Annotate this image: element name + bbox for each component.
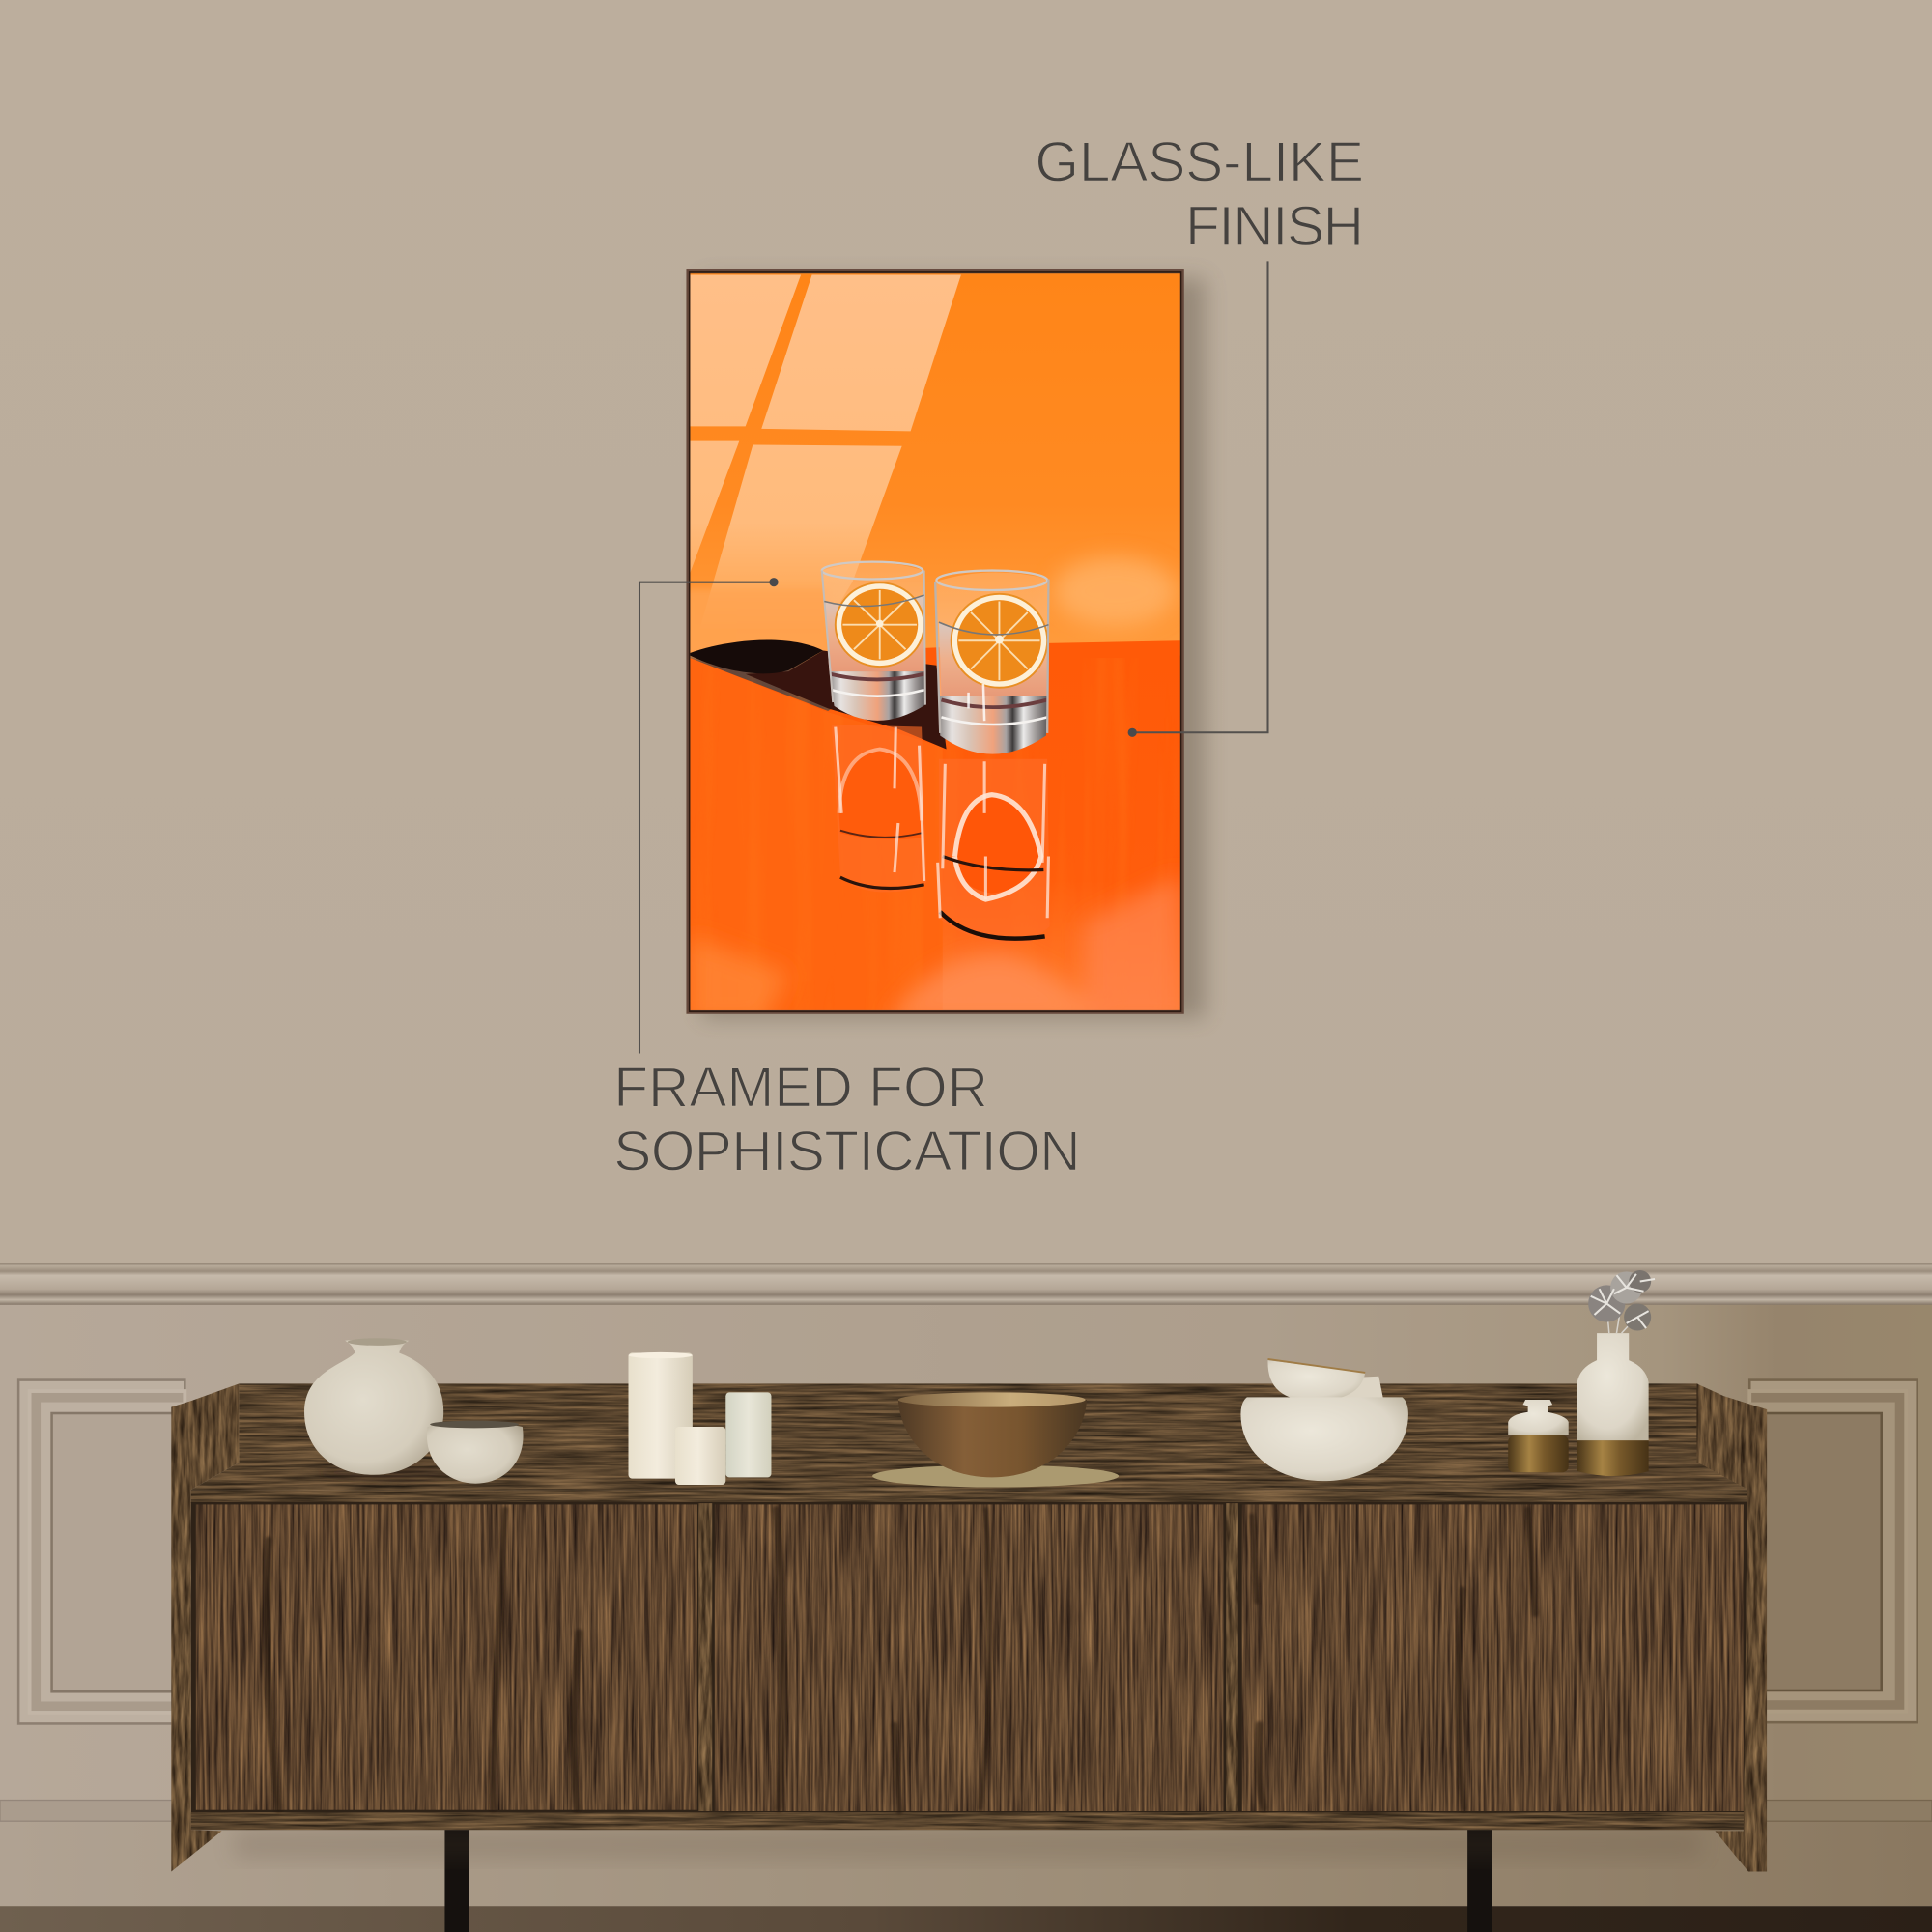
- cabinet backing: [191, 1502, 1748, 1830]
- orange slice: [836, 582, 924, 667]
- glass base: [939, 696, 1047, 754]
- frame shadow: [702, 278, 1205, 1018]
- inner frame edge: [690, 272, 1181, 1011]
- decor: dried flowers: [1588, 1270, 1655, 1333]
- decor: brass bowl: [898, 1392, 1087, 1477]
- left glass: [822, 562, 925, 721]
- glass base: [829, 671, 925, 721]
- door right: [1242, 1504, 1744, 1811]
- dark shadow wedge: [746, 650, 947, 750]
- wall below rail: [0, 1820, 1932, 1906]
- glass upper body: [936, 572, 1047, 727]
- decor: green-white candle: [725, 1392, 771, 1477]
- floor: [0, 1906, 1932, 1932]
- wall above moulding: [0, 0, 1932, 1264]
- black shadow: [690, 640, 823, 673]
- water: [824, 595, 924, 671]
- callout leader: glass-like finish: [1128, 261, 1267, 737]
- chair moulding: [0, 1263, 1932, 1305]
- bottom rail: [191, 1812, 1748, 1830]
- rim: [936, 571, 1047, 590]
- shelf top: [191, 1463, 1748, 1490]
- frame: [686, 269, 1184, 1014]
- decor: tall candle: [629, 1352, 693, 1479]
- glass upper body: [823, 562, 923, 672]
- callout leader: framed: [639, 578, 779, 1054]
- callout text: framed for sophistication: [613, 1056, 1081, 1183]
- sideboard: [171, 1383, 1767, 1872]
- right glass: [935, 571, 1048, 754]
- decor: small gold-dipped bottle: [1508, 1400, 1569, 1472]
- skirting rail: [0, 1801, 1932, 1821]
- callout text: glass-like finish: [1035, 131, 1364, 258]
- wall panel moulding left: [18, 1380, 188, 1723]
- decor: tall gold-dipped bottle: [1577, 1333, 1649, 1476]
- light bottom strokes: [690, 875, 1180, 1023]
- right inner side: [1696, 1383, 1767, 1491]
- left side front strip: [171, 1401, 222, 1872]
- left inner side: [174, 1383, 239, 1490]
- table surface: [690, 640, 1180, 1010]
- lower wall: [0, 1303, 1932, 1802]
- framed painting: [685, 269, 1205, 1023]
- decor: round cream vase: [304, 1338, 469, 1480]
- canvas painting: [685, 273, 1180, 1023]
- wall panel moulding right: [1749, 1380, 1918, 1722]
- reflection left glass: [832, 724, 926, 892]
- decor: small candle: [675, 1427, 725, 1485]
- reflection right glass: [938, 759, 1050, 944]
- callout text: framed for sophistication: SOPHISTICATION: [613, 1121, 1081, 1183]
- painted wall: [690, 273, 1180, 656]
- callout text: framed for sophistication: FRAMED FOR: [613, 1056, 988, 1119]
- door divider left: [698, 1503, 712, 1811]
- sideboard legs: [444, 1830, 1492, 1932]
- door middle: [715, 1504, 1224, 1811]
- decor: stacked white bowls: [1240, 1359, 1408, 1481]
- rim: [822, 562, 923, 579]
- wood grain streaks: [267, 1509, 1535, 1811]
- decor: small cream bowl: [427, 1421, 524, 1484]
- shadow under sideboard: [234, 1831, 1700, 1858]
- decor: woven mat: [872, 1465, 1119, 1488]
- brush streaks: [706, 659, 831, 711]
- door divider right: [1226, 1503, 1238, 1811]
- water: [939, 622, 1048, 696]
- right side front strip: [1716, 1405, 1767, 1872]
- soft light right: [1054, 557, 1177, 626]
- back panel: [239, 1383, 1698, 1465]
- callout text: glass-like finish: FINISH: [1185, 195, 1364, 258]
- callout text: glass-like finish: GLASS-LIKE: [1035, 130, 1364, 193]
- sunlight window patches: [690, 274, 961, 629]
- orange slice: [952, 594, 1047, 688]
- lower wall glow: [685, 589, 831, 658]
- door left: [196, 1504, 697, 1810]
- shelf front edge: [191, 1490, 1748, 1503]
